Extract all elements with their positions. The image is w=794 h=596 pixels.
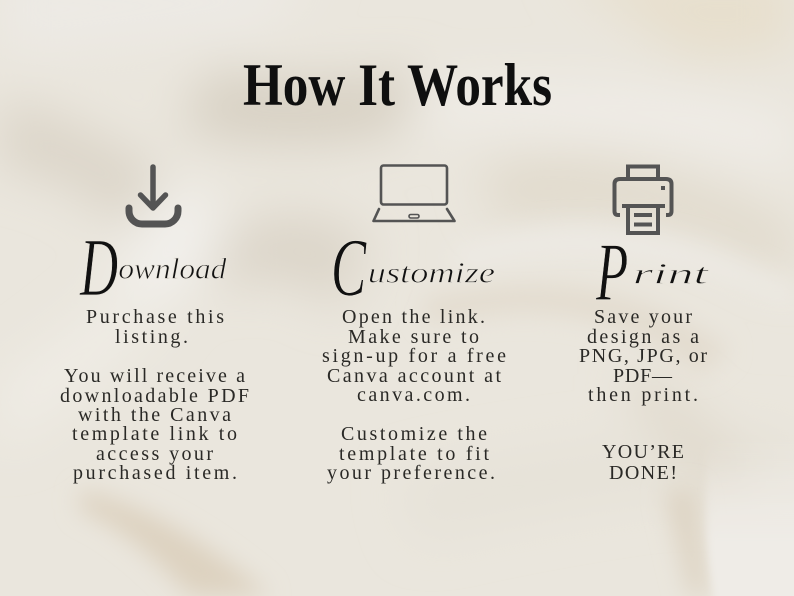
heading: Customize: ustomize — [368, 257, 495, 290]
icon: printer — [614, 166, 672, 233]
text: download instructions — [60, 306, 249, 484]
text: download instructions: access your — [96, 443, 213, 465]
column: download — [60, 167, 249, 484]
text: download instructions: Purchase this — [86, 306, 224, 328]
text: download instructions: downloadable PDF — [60, 385, 249, 407]
text: customize instructions: sign-up for a free — [322, 345, 506, 367]
heading: Print: P — [595, 226, 628, 318]
text: customize instructions: Canva account at — [327, 365, 501, 387]
text: download instructions: You will receive a — [64, 365, 245, 387]
text: download instructions: listing. — [115, 326, 188, 348]
text: download instructions: with the Canva — [78, 404, 231, 426]
text: customize instructions: your preference. — [327, 462, 495, 484]
text: print instructions: Save your — [594, 306, 692, 328]
text: print instructions: PDF— — [613, 365, 673, 387]
column: print — [579, 166, 710, 484]
text: download instructions: purchased item. — [73, 462, 237, 484]
icon: laptop — [374, 166, 454, 221]
text: customize instructions — [322, 306, 506, 484]
text: customize instructions: Make sure to — [348, 326, 479, 348]
heading: Print: rint — [633, 259, 710, 291]
column: customize — [322, 166, 506, 484]
text: customize instructions: Open the link. — [342, 306, 485, 328]
heading: Download: ownload — [118, 254, 227, 286]
text: print instructions — [579, 306, 707, 484]
icon: download arrow — [129, 167, 178, 224]
text: print instructions: YOU’RE — [602, 441, 684, 463]
text: customize instructions: canva.com. — [357, 384, 470, 406]
text: print instructions: PNG, JPG, or — [579, 345, 707, 367]
text: download instructions: template link to — [72, 423, 237, 445]
heading: Customize: C — [331, 221, 367, 313]
text: customize instructions: template to fit — [339, 443, 489, 465]
heading: Download: D — [79, 221, 118, 313]
text: print instructions: then print. — [588, 384, 698, 406]
text: print instructions: DONE! — [609, 462, 677, 484]
title: How It Works — [243, 52, 552, 118]
text: customize instructions: Customize the — [341, 423, 487, 445]
text: print instructions: design as a — [587, 326, 699, 348]
